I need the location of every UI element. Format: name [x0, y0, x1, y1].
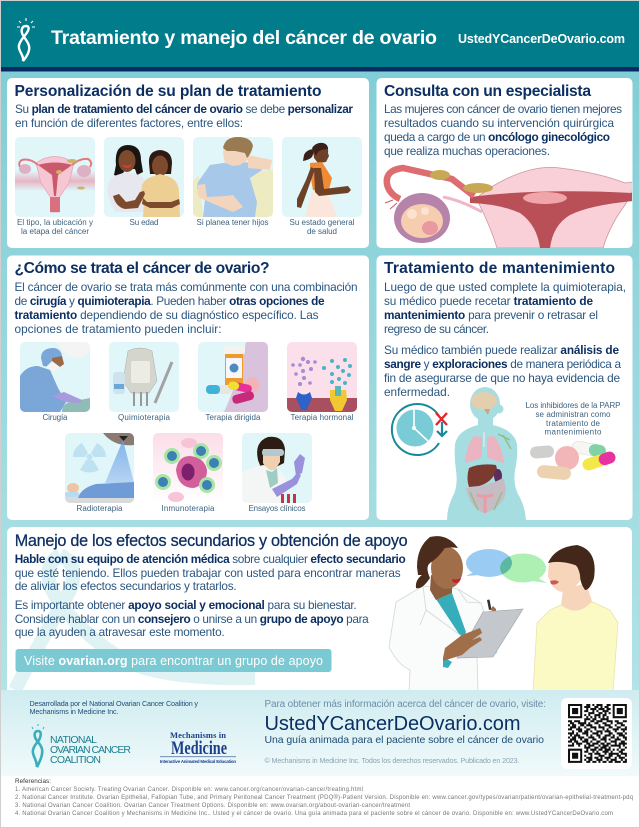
- panel: cómo se trata: [7, 256, 369, 520]
- text block: cómo se trata: tratamiento dependiendo de su diagnóstico específico. Las: [14, 308, 319, 322]
- icon: immunotherapy tile: [153, 433, 223, 503]
- logo: Mechanisms in Medicine: Medicine: [171, 738, 227, 759]
- logo: National Ovarian Cancer Coalition: NATIONAL: [50, 734, 97, 746]
- text: developed by: Mechanisms in Medicine Inc.: [30, 707, 118, 716]
- text: PARP note: se administran como: [536, 410, 611, 419]
- text block: cómo se trata: [14, 280, 358, 336]
- text: copyright: © Mechanisms in Medicine Inc. Todos los derechos reservados. Publicado en 2023.: [264, 756, 520, 765]
- caption: estado: de salud: [307, 227, 337, 236]
- text block: manejo 2: que la ayuden a atravesar este momento.: [15, 625, 225, 639]
- text: developed by: [30, 699, 198, 716]
- text block: manejo 2: [15, 598, 369, 639]
- caption: terapia hormonal: Terapia hormonal: [290, 413, 354, 422]
- caption: inmunoterapia: Inmunoterapia: [162, 504, 215, 513]
- icon: hormone therapy tile: [287, 342, 357, 412]
- illustration: doctor: [389, 536, 523, 692]
- title: Tratamiento y manejo del cáncer de ovario: [51, 27, 437, 49]
- text block: mantenimiento 1: [384, 280, 626, 336]
- text block: personalización: en función de diferentes factores, entre ellos:: [15, 116, 243, 130]
- text block: manejo 1: que esté teniendo. Ellos pueden trabajar con usted para encontrar maneras: [15, 566, 401, 580]
- caption: tipo: [17, 218, 93, 236]
- caption: quimioterapia: Quimioterapia: [118, 413, 171, 422]
- text block: mantenimiento 1: Luego de que usted complete la quimioterapia,: [384, 280, 626, 294]
- logo: Mechanisms in Medicine: [160, 730, 236, 764]
- icon: chemotherapy tile: [109, 342, 179, 412]
- header url: UstedYCancerDeOvario.com: [458, 32, 625, 46]
- text: developed by: Desarrollada por el National Ovarian Cancer Coalition y: [30, 699, 198, 708]
- references: 4. National Ovarian Cancer Coalition y Mechanisms in Medicine Inc.. Usted y el cáncer de ovario. Una guía animada para el paciente sobre el cáncer de ovario. Disponible en: www.UstedYCancerDeOvario.com: [15, 811, 613, 817]
- references: 1. American Cancer Society. Treating Ovarian Cancer. Disponible en: www.cancer.org/cancer/ovarian-cancer/treating.html: [15, 787, 363, 793]
- references: 3. National Ovarian Cancer Coalition. Ovarian Cancer Treatment Options. Disponible en: www.ovarian.org/about-ovarian-cancer/treatment: [15, 803, 410, 809]
- heading: manejo: Manejo de los efectos secundarios y obtención de apoyo: [15, 532, 408, 550]
- logo: National Ovarian Cancer Coalition: COALITION: [50, 754, 101, 766]
- references: [15, 778, 633, 817]
- panel: personalización: [7, 78, 369, 248]
- logo: Mechanisms in Medicine: Interactive Animated Medical Education: [160, 759, 236, 764]
- button: visit ovarian.org: [16, 649, 332, 672]
- caption: tipo: la etapa del cáncer: [21, 227, 89, 236]
- text block: cómo se trata: de cirugía y quimioterapia. Pueden haber otras opciones de: [14, 294, 325, 308]
- text block: mantenimiento 2: enfermedad.: [384, 385, 450, 399]
- text block: manejo 2: Es importante obtener apoyo social y emocional para su bienestar.: [15, 598, 357, 612]
- logo: National Ovarian Cancer Coalition: OVARIAN CANCER: [50, 744, 131, 756]
- watermark: ribbon: [15, 555, 255, 690]
- panel: especialista: [376, 78, 633, 248]
- caption: hijos: Si planea tener hijos: [196, 218, 268, 227]
- heading: cómo se trata: ¿Cómo se trata el cáncer de ovario?: [14, 260, 270, 277]
- text: animated guide: Una guía animada para el paciente sobre el cáncer de ovario: [264, 734, 544, 746]
- heading: especialista: Consulta con un especialista: [384, 83, 591, 100]
- caption: radioterapia: Radioterapia: [76, 504, 123, 513]
- text block: especialista: queda a cargo de un oncólogo ginecológico: [384, 130, 610, 144]
- text block: mantenimiento 1: regreso de su cáncer.: [384, 322, 489, 336]
- icon: surgeon tile: [20, 342, 90, 412]
- text block: mantenimiento 1: su médico puede recetar tratamiento de: [384, 294, 593, 308]
- text block: mantenimiento 2: sangre y exploraciones de manera periódica a: [384, 357, 621, 371]
- text block: mantenimiento 2: [384, 343, 621, 399]
- text block: especialista: que realiza muchas operaciones.: [384, 144, 550, 158]
- caption: estado: [290, 218, 355, 236]
- caption: tipo: El tipo, la ubicación y: [17, 218, 93, 227]
- text block: especialista: Las mujeres con cáncer de ovario tienen mejores: [384, 102, 622, 116]
- text: PARP note: mantenimiento: [544, 428, 602, 436]
- icon: pills: [530, 440, 617, 480]
- text block: manejo 2: Considere hablar con un consejero o unirse a un grupo de apoyo para: [15, 612, 369, 626]
- text block: especialista: resultados cuando su intervención quirúrgica: [384, 116, 614, 130]
- text: more information: Para obtener más información acerca del cáncer de ovario, visite:: [264, 699, 546, 710]
- illustration: body with organs: [447, 387, 526, 520]
- references: 2. National Cancer Institute. Ovarian Epithelial, Fallopian Tube, and Primary Peritoneal Cancer Treatment (PDQ®)-Patient Version. Disponible en: www.cancer.gov/types/ovarian/patient/ovarian-epithelial-treatment-pdq: [15, 794, 633, 801]
- illustration: patient: [533, 545, 618, 692]
- icon: clinical trials tile: [242, 433, 312, 503]
- QR code: [561, 698, 632, 769]
- text: PARP note: [526, 401, 620, 436]
- logo: National Ovarian Cancer Coalition: [32, 724, 131, 767]
- text block: cómo se trata: El cáncer de ovario se trata más comúnmente con una combinación: [14, 280, 358, 294]
- panel: mantenimiento: [376, 256, 632, 520]
- text block: personalización: [15, 102, 353, 130]
- text block: mantenimiento 1: mantenimiento para prevenir o retrasar el: [384, 308, 598, 322]
- header banner: [0, 0, 640, 72]
- text block: manejo 1: Hable con su equipo de atención médica sobre cualquier efecto secundario: [15, 552, 406, 566]
- caption: edad: Su edad: [130, 218, 158, 227]
- logo: Mechanisms in Medicine: Mechanisms in: [170, 730, 226, 740]
- references: Referencias:: [15, 778, 51, 785]
- icon: two women tile: [104, 137, 184, 217]
- text block: cómo se trata: opciones de tratamiento pueden incluir:: [14, 322, 222, 336]
- caption: terapia dirigida: Terapia dirigida: [206, 413, 261, 422]
- button: visit ovarian.org: Visite ovarian.org para encontrar un grupo de apoyo: [24, 654, 323, 668]
- icon: targeted therapy tile: [198, 342, 268, 412]
- caption: ensayos: Ensayos clínicos: [248, 504, 306, 513]
- text block: manejo 1: de aliviar los efectos secundarios y tratarlos.: [15, 579, 237, 593]
- text: website url: UstedYCancerDeOvario.com: [264, 713, 520, 735]
- text: PARP note: Los inhibidores de la PARP: [526, 401, 620, 410]
- panel: manejo de efectos: [7, 527, 632, 697]
- icon: clock with arrow: [392, 404, 447, 455]
- text block: mantenimiento 2: Su médico también puede realizar análisis de: [384, 343, 619, 357]
- icon: walking woman tile: [282, 137, 362, 217]
- caption: estado: Su estado general: [290, 218, 355, 227]
- panel: footer: [0, 690, 640, 776]
- text block: personalización: Su plan de tratamiento del cáncer de ovario se debe personalizar: [15, 102, 353, 116]
- caption: cirugía: Cirugía: [42, 413, 68, 422]
- text block: mantenimiento 2: fin de asegurarse de que no haya evidencia de: [384, 371, 620, 385]
- text: PARP note: tratamiento de: [546, 419, 601, 428]
- icon: pregnant woman tile: [193, 137, 273, 217]
- heading: personalización: Personalización de su plan de tratamiento: [14, 83, 322, 100]
- icon: speech bubbles: [466, 549, 547, 583]
- text block: manejo 1: [15, 552, 406, 593]
- illustration: fallopian tube, ovary and uterus: [385, 167, 633, 248]
- icon: radiotherapy tile: [65, 433, 134, 503]
- icon: uterus tile: [15, 137, 95, 217]
- heading: mantenimiento: Tratamiento de mantenimiento: [384, 260, 615, 277]
- icon: awareness ribbon with rays: [17, 18, 35, 61]
- text block: especialista: [384, 102, 622, 158]
